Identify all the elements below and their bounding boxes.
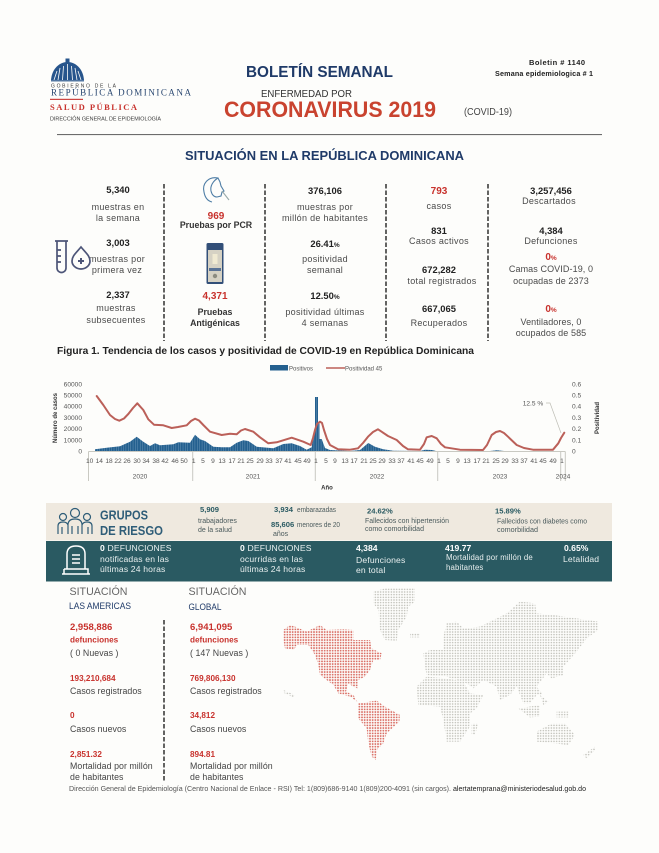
week labels: 41 [407,458,415,465]
week labels: 29 [501,458,509,465]
diabetes [495,506,587,534]
heading: las americas: SITUACIÓN [70,585,128,598]
total cases: total registrados [407,276,477,286]
week labels: 17 [473,458,481,465]
subsequent samples: 2,337 [106,289,130,300]
samples in week: la semana [96,213,140,223]
deaths notified [100,543,172,574]
hypertension: Fallecidos con hipertensión [365,518,449,525]
week labels: 14 [96,458,103,465]
first-time samples: primera vez [92,265,142,275]
deaths [524,225,578,246]
lethality [563,543,599,564]
weekly positivity: 26.41% [310,238,340,249]
samples in week [92,184,144,223]
samples per million [282,185,368,223]
cases registered: 769,806,130 [190,674,236,683]
subsequent samples: subsecuentes [86,315,146,325]
week labels: 1 [314,458,318,465]
panel: tests [180,178,253,328]
hypertension: 24.62% [367,506,393,516]
bulletin number: Boletin # 1140 [529,58,585,67]
ventilators: 0% [545,304,557,315]
week labels: 13 [341,458,349,465]
deaths notified: últimas 24 horas [100,564,165,574]
pcr label: Pruebas por PCR [180,220,253,230]
pcr count: 969 [208,211,225,222]
four-week positivity: positividad últimas [285,307,365,317]
week labels: 9 [211,458,215,465]
total cases: 672,282 [422,264,456,275]
lethality: Letalidad [563,554,599,564]
week labels: 17 [228,458,236,465]
rest of world [283,588,598,758]
cases registered: Casos registrados [190,686,262,696]
pregnant: embarazadas [297,507,336,514]
diabetes: Fallecidos con diabetes como [497,518,587,526]
deaths: Defunciones [524,236,578,246]
weekly positivity: positividad [302,254,348,264]
year labels: 2022 [370,474,385,480]
line: positivity [97,396,564,450]
deaths occurred: 0 DEFUNCIONES [240,543,312,553]
week labels: 26 [123,458,131,465]
right axis title: Positividad [595,402,601,434]
ventilators: ocupados de 585 [516,328,586,338]
deaths occurred: ocurridas en las [240,554,303,564]
week labels: 29 [378,458,386,465]
legend [270,365,383,372]
americas highlighted [283,625,400,760]
title: boletín semanal: BOLETÍN SEMANAL [246,62,393,81]
icon: test tube and drop [55,241,90,272]
samples per million: millón de habitantes [282,213,368,223]
icon: dome [51,58,84,81]
mortality: Mortalidad por millón [70,761,153,771]
legend: Positividad 45 [345,366,383,372]
bars: positive cases [95,397,565,451]
icon: people [58,508,92,534]
mortality: 419.77 [445,543,472,553]
right axis labels: 0.5 [572,392,581,400]
heading: situation in DR: SITUACIÓN EN LA REPÚBLICA DOMINICANA [185,148,464,163]
heading: global: SITUACIÓN [188,585,247,598]
panel: deaths band [46,541,612,582]
year labels: 2020 [133,474,148,480]
panel: americas [69,585,153,782]
heading: las americas: LAS AMERICAS [69,601,131,611]
left axis labels: 10000 [64,437,82,444]
lethality: 0.65% [564,543,589,553]
week labels: 1 [437,458,441,465]
epidemiological week: Semana epidemiologica # 1 [495,69,593,78]
week labels: 50 [180,458,188,465]
new cases: 34,812 [190,711,215,720]
subsequent samples [86,289,146,325]
health workers: trabajadores [198,518,237,525]
hypertension: como comorbilidad [365,526,424,533]
four-week positivity: 4 semanas [302,318,349,328]
mortality [190,750,273,782]
pregnant [274,505,336,514]
left axis labels [64,382,82,456]
footer contact: Dirección General de Epidemiología (Centro Nacional de Enlace - RSI) Tel: 1(809)686-9140 1(809)200-4091 (sin cargos). [69,786,451,793]
recovered: 667,065 [422,303,456,314]
samples per million: muestras por [297,202,353,212]
week labels: 45 [539,458,547,465]
week labels: 21 [482,458,490,465]
panel: samples [86,184,146,325]
icon: antigen test kit [206,243,224,284]
total deaths: 4,384 [356,543,378,553]
mortality: de habitantes [70,772,124,782]
deaths [190,622,248,658]
mortality: Mortalidad por millón [190,761,273,771]
cases registered [190,674,262,696]
panel: risk groups [46,503,612,540]
left axis labels: 60000 [64,382,82,388]
week labels: 9 [456,458,460,465]
first-time samples: 3,003 [106,237,130,248]
deaths occurred [240,543,312,574]
week labels: 41 [284,458,292,465]
minors [271,520,340,538]
right axis labels: 0.2 [572,426,581,433]
legend: Positivos [289,366,313,372]
government name: GOBIERNO DE LA [51,84,117,90]
subtitle: enfermedad por: ENFERMEDAD POR [261,89,352,100]
week labels: 29 [256,458,264,465]
week labels: 18 [105,458,113,465]
total deaths [356,543,405,575]
right axis labels [572,382,581,456]
discarded: Descartados [522,196,576,206]
week labels: 13 [463,458,471,465]
week labels: 25 [492,458,500,465]
heading: grupos de riesgo: DE RIESGO [100,523,163,538]
right axis labels: 0.1 [572,437,581,444]
week labels: 13 [218,458,226,465]
week labels: 5 [446,458,450,465]
first-time samples: muestras por [89,254,145,264]
week labels: 21 [237,458,245,465]
health workers: 5,909 [200,505,219,514]
red rule [50,99,83,100]
bed occupancy: Camas COVID-19, 0 [509,264,593,274]
year labels [133,474,571,480]
icon: nasal swab head [204,178,229,202]
bed occupancy: ocupadas de 2373 [513,276,589,286]
heading: global: GLOBAL [188,602,222,612]
republic name: REPÚBLICA DOMINICANA [51,88,192,98]
ventilators [516,304,586,338]
antigen label: Pruebas [198,307,232,317]
subsequent samples: muestras [96,303,136,313]
active cases: 831 [431,225,447,236]
left axis labels: 40000 [64,404,82,411]
week labels: 1 [560,458,564,465]
week labels: 45 [416,458,424,465]
heading: figure 1: Figura 1. Tendencia de los casos y positividad de COVID-19 en República Dominicana [57,346,474,357]
panel: rates [282,185,368,328]
week labels: 33 [388,458,396,465]
four-week positivity: 12.50% [310,290,340,301]
week labels: 38 [152,458,160,465]
left axis labels: 30000 [64,415,82,422]
week labels: 42 [161,458,169,465]
x axis title: Año [321,486,333,492]
week labels: 34 [142,458,150,465]
week labels: 17 [350,458,358,465]
deaths: 2,958,886 [70,622,112,633]
left axis labels: 0 [78,448,82,456]
deaths notified: notificadas en las [100,554,169,564]
footer contact: alertatemprana@ministeriodesalud.gob.do [453,786,586,793]
total cases [407,264,477,286]
ministry name: SALUD PÚBLICA [50,102,138,112]
mortality [445,543,533,572]
deaths notified: 0 DEFUNCIONES [100,543,172,553]
health workers [198,505,237,534]
mortality: de habitantes [190,772,244,782]
cases registered: 193,210,684 [70,674,116,683]
covid-19 note: (COVID-19) [464,107,512,118]
pregnant: 3,934 [274,505,294,514]
deaths: defunciones [70,636,119,644]
discarded [522,185,576,206]
total deaths: Defunciones [356,555,405,565]
cases registered: Casos registrados [70,686,142,696]
week labels: 37 [397,458,405,465]
week labels: 41 [530,458,538,465]
mortality: 2,851.32 [70,750,102,759]
recovered: Recuperados [411,318,468,328]
week labels: 49 [549,458,557,465]
heading: global [188,585,247,612]
week labels: 33 [265,458,273,465]
minors: menores de 20 [297,522,340,529]
new cases [70,711,127,734]
samples per million: 376,106 [308,185,342,196]
cases registered [70,674,142,696]
axis baseline and year dividers [88,452,565,481]
weekly positivity [302,238,348,275]
recovered [411,303,468,328]
dotted world map [283,588,598,760]
year labels: 2023 [493,474,508,480]
mortality [70,750,153,782]
bed occupancy: 0% [545,252,557,263]
mortality: habitantes [446,563,483,572]
new cases: 793 [431,186,448,197]
deaths: ( 0 Nuevas ) [70,648,119,658]
panel: tests: Antigénicas [190,318,240,328]
minors: años [273,531,289,538]
discarded: 3,257,456 [530,185,572,196]
week labels: 49 [303,458,311,465]
deaths: defunciones [190,636,239,644]
hypertension [365,506,449,533]
antigen count: 4,371 [202,291,228,302]
deaths [70,622,119,658]
new cases: Casos nuevos [70,724,127,734]
panel: outcomes [509,185,593,338]
week labels: 21 [360,458,368,465]
title: coronavirus 2019: CORONAVIRUS 2019 [224,97,436,122]
deaths occurred: últimas 24 horas [240,564,305,574]
week labels: 5 [324,458,328,465]
right axis labels: 0.6 [572,382,581,388]
week labels: 25 [246,458,254,465]
week labels: 5 [201,458,205,465]
week labels: 10 [86,458,94,465]
new cases: 0 [70,711,75,720]
callout: 12.5 % [523,401,561,433]
year labels: 2021 [246,474,261,480]
active cases [409,225,469,246]
mortality: Mortalidad por millón de [446,553,533,562]
week labels: 49 [426,458,434,465]
first-time samples [89,237,145,275]
week labels: 37 [275,458,283,465]
samples in week: 5,340 [106,184,130,195]
week labels: 22 [114,458,122,465]
left axis labels: 20000 [64,426,82,433]
week labels: 37 [520,458,528,465]
right axis labels: 0.3 [572,415,581,422]
active cases: Casos activos [409,236,469,246]
total deaths: en total [356,565,385,575]
new cases: Casos nuevos [190,724,247,734]
week labels: 1 [192,458,196,465]
direction name: DIRECCIÓN GENERAL DE EPIDEMIOLOGÍA [50,116,161,122]
line and bar chart [53,365,601,492]
samples in week: muestras en [92,202,144,212]
week labels: 45 [294,458,302,465]
week labels: 46 [171,458,179,465]
panel: cases [407,186,477,328]
right axis labels: 0.4 [572,404,581,411]
deaths: 6,941,095 [190,622,233,633]
new cases: casos [426,201,452,211]
deaths: 4,384 [539,225,564,236]
left axis title: Número de casos [53,392,59,443]
mortality: 894.81 [190,750,215,759]
minors: 85,606 [271,520,294,529]
year labels: 2024 [556,474,571,480]
diabetes: comorbilidad [497,527,538,534]
panel: global [188,585,273,782]
ventilators: Ventiladores, 0 [520,317,582,327]
weekly positivity: semanal [307,265,343,275]
right axis labels: 0 [572,448,576,456]
week labels: 25 [369,458,377,465]
week labels [86,458,564,465]
callout: 12.5 %: 12.5 % [523,401,543,408]
week labels: 9 [333,458,337,465]
heading: grupos de riesgo: GRUPOS [100,508,148,522]
left axis labels: 50000 [64,392,82,400]
week labels: 30 [133,458,141,465]
heading: grupos de riesgo [100,508,163,538]
four-week positivity [285,290,365,328]
week labels: 33 [511,458,519,465]
new cases [426,186,452,211]
diabetes: 15.89% [495,506,521,516]
bed occupancy [509,252,593,286]
deaths: ( 147 Nuevas ) [190,648,248,658]
icon: tombstone [62,546,90,574]
heading: las americas [69,585,131,611]
header logo [50,58,192,122]
health workers: de la salud [198,527,232,534]
new cases [190,711,247,734]
